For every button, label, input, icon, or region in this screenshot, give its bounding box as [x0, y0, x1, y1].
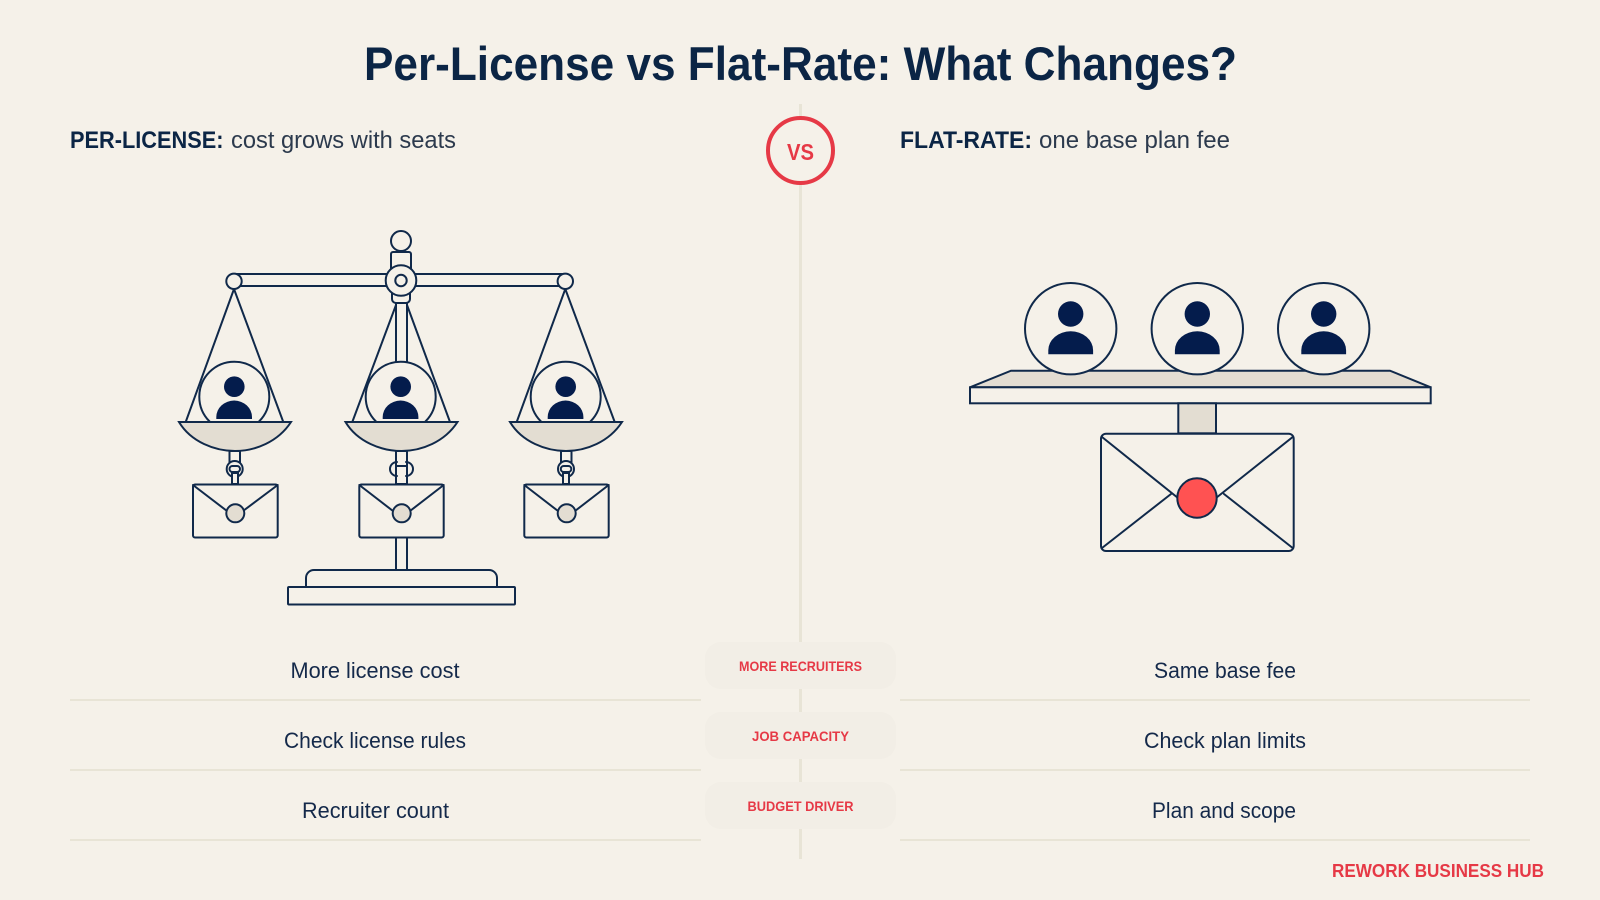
seat 1	[1025, 283, 1116, 374]
right heading	[900, 127, 1230, 154]
left heading	[70, 127, 456, 154]
left comparison rows	[284, 658, 466, 823]
pill: budget driver	[705, 782, 896, 829]
right pan with person and envelope	[510, 289, 622, 538]
pill: job capacity	[705, 712, 896, 759]
right heading: FLAT-RATE:	[900, 127, 1032, 154]
platform	[970, 371, 1431, 433]
scale column	[396, 298, 407, 368]
left heading: PER-LICENSE:	[70, 127, 224, 154]
left heading: cost grows with seats	[231, 127, 456, 154]
pill: job capacity: JOB CAPACITY	[752, 728, 850, 744]
scale beam	[226, 231, 573, 303]
pill: more recruiters	[705, 642, 896, 689]
pill: more recruiters: MORE RECRUITERS	[739, 658, 862, 674]
illustration: per-license scale	[179, 231, 622, 604]
VS badge: VS	[787, 139, 814, 165]
right comparison rows: Plan and scope	[1152, 798, 1296, 823]
left pan with person and envelope	[179, 289, 291, 538]
row dividers	[70, 699, 1530, 841]
title: Per-License vs Flat-Rate: What Changes?	[364, 37, 1237, 90]
flat-fee envelope	[1101, 434, 1294, 551]
middle pan with person and envelope	[346, 305, 458, 538]
right heading: one base plan fee	[1039, 127, 1230, 154]
left comparison rows: Check license rules	[284, 728, 466, 753]
left comparison rows: More license cost	[290, 658, 460, 683]
footer brand: REWORK BUSINESS HUB	[1332, 861, 1544, 881]
right comparison rows: Same base fee	[1154, 658, 1296, 683]
illustration: flat-rate platform	[970, 283, 1431, 551]
right comparison rows	[1144, 658, 1306, 823]
seat 2	[1152, 283, 1243, 374]
pill: budget driver: BUDGET DRIVER	[748, 798, 854, 814]
right comparison rows: Check plan limits	[1144, 728, 1306, 753]
seat 3	[1278, 283, 1369, 374]
left comparison rows: Recruiter count	[302, 798, 449, 823]
VS badge	[768, 118, 833, 183]
scale base	[288, 537, 515, 604]
